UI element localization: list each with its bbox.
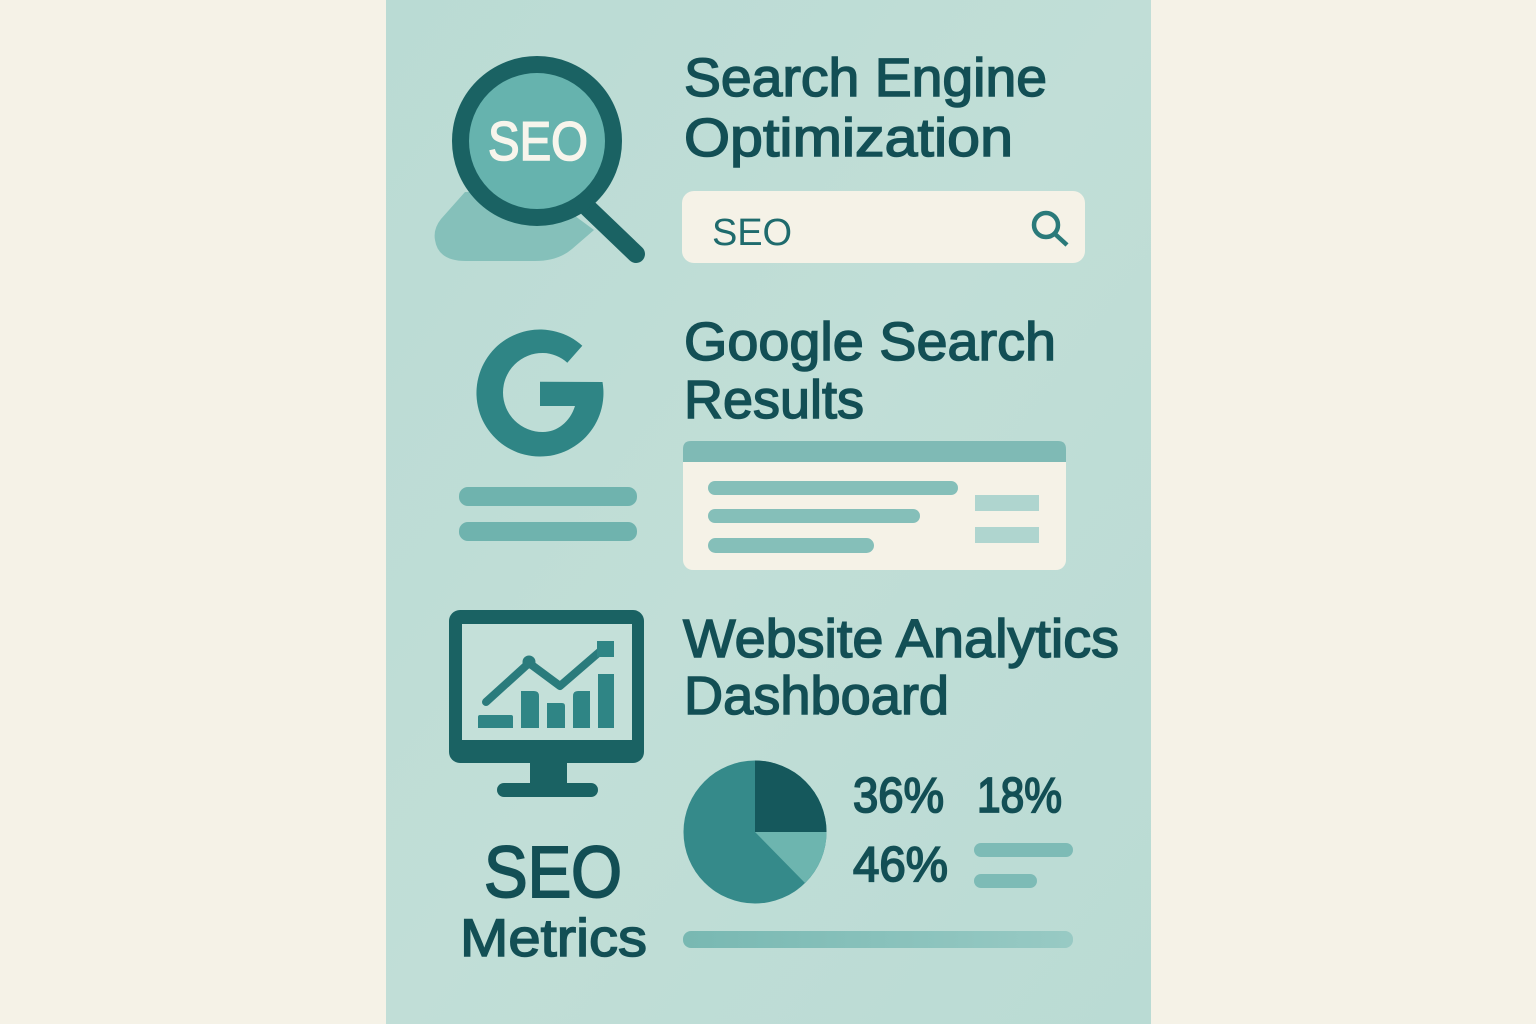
heading: Search Engine Optimization [684, 48, 1047, 168]
heading: Website Analytics Dashboard [683, 609, 1119, 726]
monitor screen [462, 624, 632, 740]
heading: Search Engine Optimization: Search Engine [684, 48, 1047, 108]
label: SEO Metrics: Metrics [460, 909, 647, 968]
heading: Google Search Results [684, 312, 1056, 430]
panel: search results browser card [683, 441, 1066, 570]
heading: Google Search Results: Google Search [684, 312, 1056, 372]
SEO lens text: SEO [488, 110, 588, 172]
heading: Website Analytics Dashboard: Dashboard [684, 666, 949, 726]
side result blocks [975, 495, 1039, 543]
icon: magnifier lens [460, 64, 614, 218]
legend bars [974, 843, 1073, 888]
label: SEO Metrics: SEO [484, 833, 622, 913]
icon: analytics monitor [449, 610, 644, 797]
heading: Google Search Results: Results [684, 370, 864, 430]
bottom progress bar [683, 931, 1073, 948]
percentage stats [853, 769, 1062, 892]
heading: Website Analytics Dashboard: Website Analytics [683, 609, 1119, 669]
panel: background column [386, 0, 1151, 1024]
result lines [708, 481, 958, 553]
browser header bar [683, 441, 1066, 462]
search bar [682, 191, 1085, 263]
icon: Google G logo [476, 330, 603, 457]
percentage stats: 36% [853, 769, 944, 823]
icon: magnifier handle [588, 208, 636, 254]
icon: small search [1034, 213, 1067, 245]
percentage stats: 18% [977, 769, 1062, 823]
pie chart [684, 760, 826, 904]
placeholder bars below G [459, 487, 637, 541]
icon: blob shadow behind magnifier [435, 190, 594, 261]
heading: Search Engine Optimization: Optimization [684, 108, 1013, 168]
monitor trend line [486, 641, 614, 702]
percentage stats: 46% [853, 838, 948, 892]
label: SEO Metrics [460, 833, 647, 968]
search bar text: SEO [712, 212, 792, 254]
monitor bar chart [478, 674, 614, 728]
monitor body [449, 610, 644, 763]
icon: SEO magnifying glass [435, 64, 636, 261]
monitor stand [497, 760, 598, 797]
